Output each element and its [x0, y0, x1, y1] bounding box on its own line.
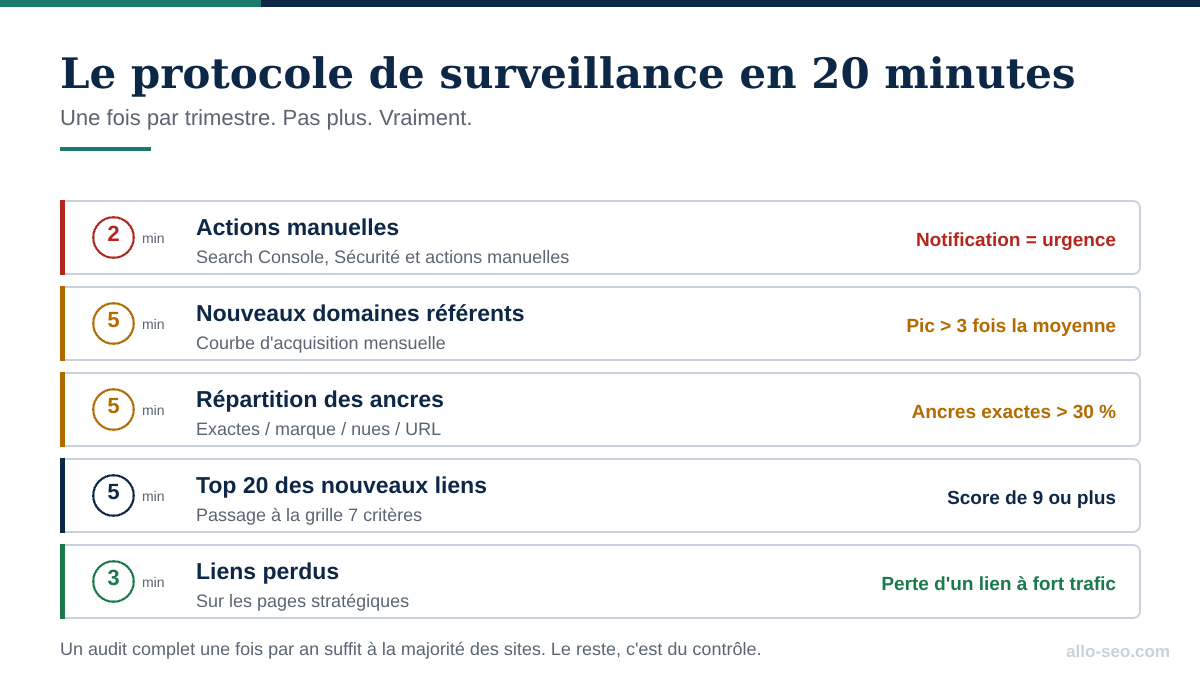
row: top 20: Score de 9 ou plus — [947, 488, 1116, 509]
row: nouveaux domaines: Courbe d'acquisition mensuelle — [196, 333, 446, 353]
row: répartition des ancres: Ancres exactes > 30 % — [912, 402, 1116, 423]
row: actions manuelles: 2 — [107, 221, 120, 246]
row: actions manuelles — [60, 200, 1141, 275]
row: liens perdus: Perte d'un lien à fort trafic — [881, 574, 1116, 595]
row: top 20: Top 20 des nouveaux liens — [196, 472, 487, 498]
row: top 20 — [60, 458, 1141, 533]
row: top 20: min — [142, 488, 165, 504]
row: répartition des ancres: Répartition des ancres — [196, 386, 444, 412]
top accent bar — [0, 0, 1200, 7]
row: top 20: Passage à la grille 7 critères — [196, 505, 422, 525]
row: nouveaux domaines: Pic > 3 fois la moyenne — [906, 316, 1116, 337]
row: nouveaux domaines — [60, 286, 1141, 361]
row: liens perdus: 3 — [107, 565, 120, 590]
row: actions manuelles: Actions manuelles — [196, 214, 399, 240]
row: liens perdus — [60, 544, 1141, 619]
subtitle: Une fois par trimestre. Pas plus. Vraiment. — [60, 105, 472, 130]
row: nouveaux domaines: min — [142, 316, 165, 332]
row: actions manuelles: Notification = urgence — [916, 230, 1116, 251]
row: liens perdus: Liens perdus — [196, 558, 339, 584]
title: Le protocole de surveillance en 20 minutes — [60, 49, 1076, 98]
row: liens perdus: min — [142, 574, 165, 590]
row: actions manuelles: min — [142, 230, 165, 246]
row: répartition des ancres: min — [142, 402, 165, 418]
title underline — [60, 147, 151, 151]
row: liens perdus: Sur les pages stratégiques — [196, 591, 409, 611]
footer note: Un audit complet une fois par an suffit à la majorité des sites. Le reste, c'est du contrôle. — [60, 639, 761, 659]
watermark: allo-seo.com — [1066, 642, 1170, 661]
row: actions manuelles: Search Console, Sécurité et actions manuelles — [196, 247, 569, 267]
row: nouveaux domaines: Nouveaux domaines référents — [196, 300, 525, 326]
row: nouveaux domaines: 5 — [107, 307, 120, 332]
row: répartition des ancres: 5 — [107, 393, 120, 418]
row: top 20: 5 — [107, 479, 120, 504]
row: répartition des ancres: Exactes / marque / nues / URL — [196, 419, 441, 439]
row: répartition des ancres — [60, 372, 1141, 447]
